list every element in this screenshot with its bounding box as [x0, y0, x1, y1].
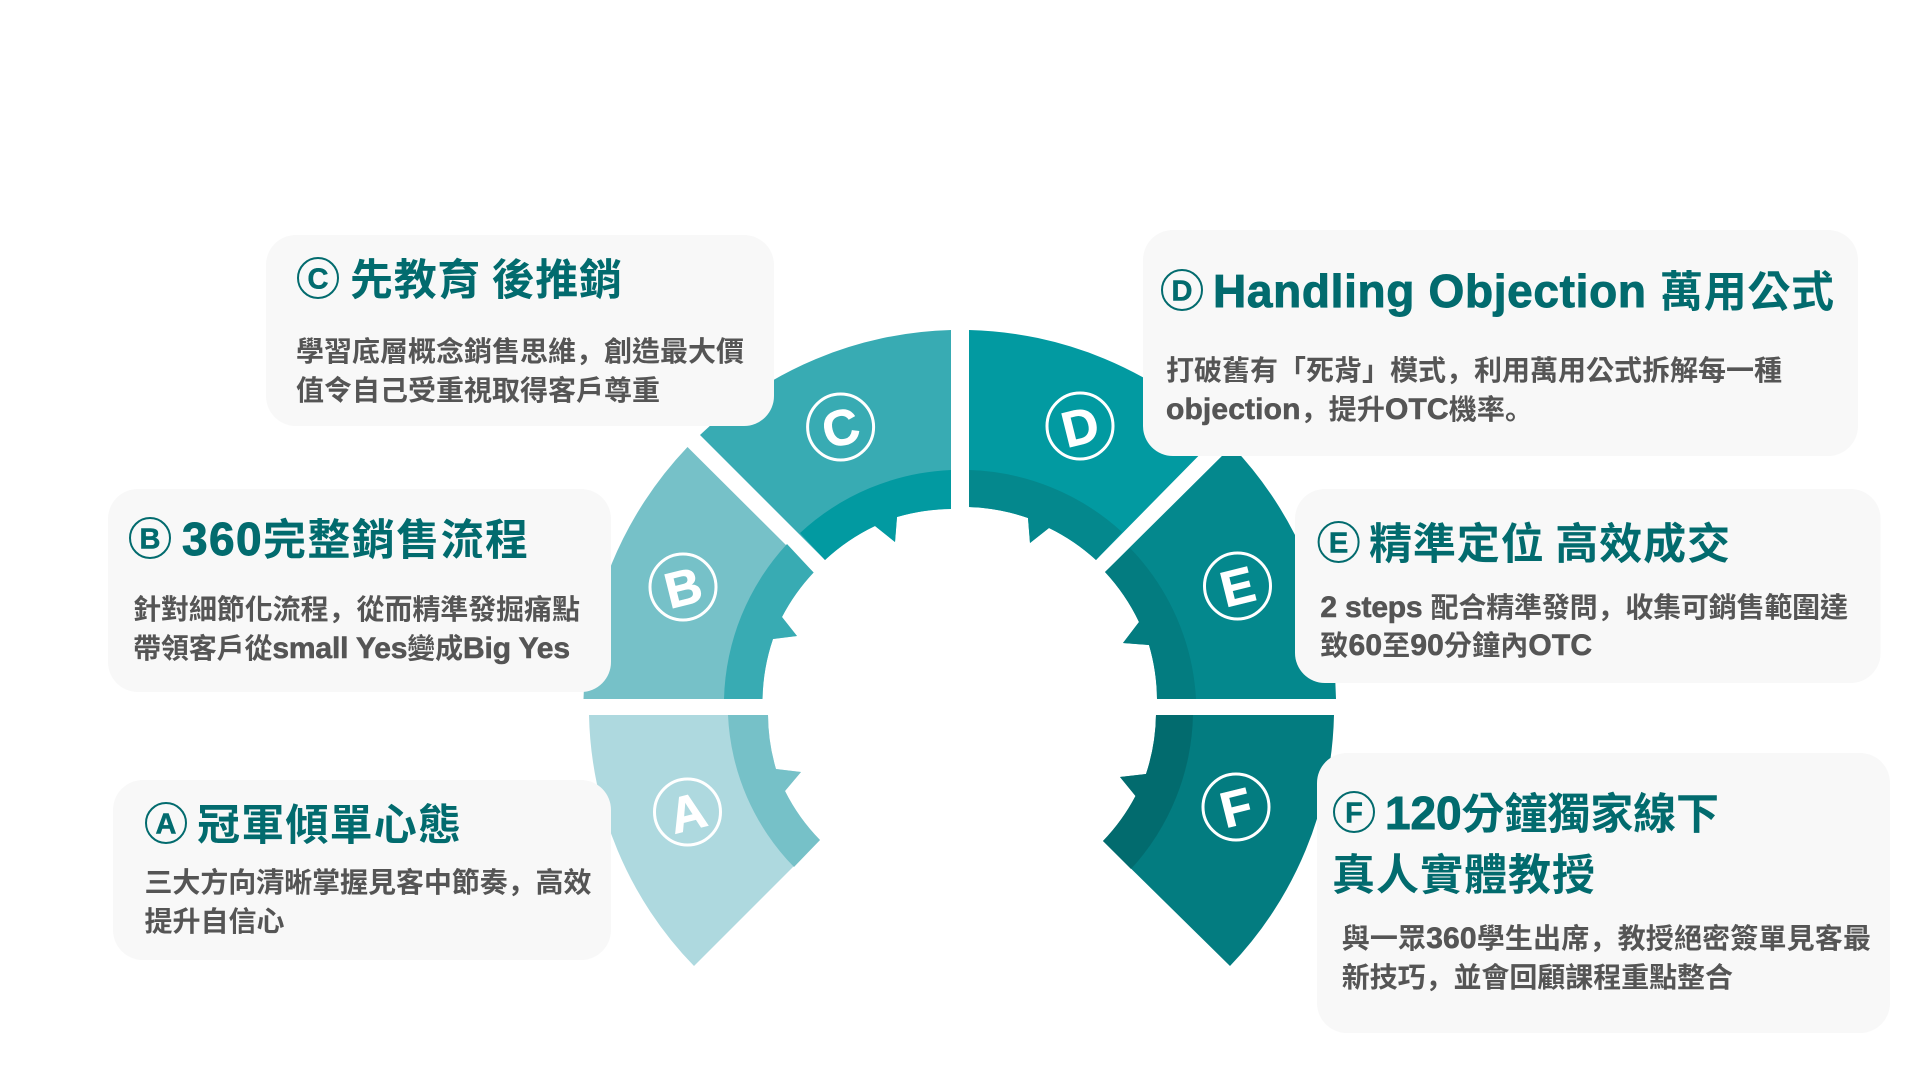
- heading D: Handling Objection 萬用公式: [1213, 258, 1834, 320]
- body text C: 學習底層概念銷售思維，創造最大價: [296, 330, 744, 370]
- badge D: D: [1172, 276, 1192, 308]
- segment E: [1105, 446, 1336, 699]
- body text D: 打破舊有「死背」模式，利用萬用公式拆解每一種: [1166, 349, 1782, 389]
- body text C: [296, 330, 744, 409]
- segment B: B: [659, 556, 708, 620]
- body text B: 帶領客戶從small Yes變成Big Yes: [133, 627, 570, 667]
- panel: D Handling Objection 萬用公式: [1143, 230, 1858, 456]
- segment A: [589, 715, 820, 966]
- segment E: E: [1215, 556, 1261, 618]
- body text A: 三大方向清晰掌握見客中節奏，高效: [144, 861, 592, 901]
- body text F: 與一眾360學生出席，教授絕密簽單見客最: [1342, 917, 1871, 957]
- body text E: [1320, 586, 1848, 664]
- body text F: 新技巧，並會回顧課程重點整合: [1342, 956, 1733, 996]
- heading E: 精準定位 高效成交: [1369, 510, 1730, 572]
- badge C: C: [308, 264, 329, 296]
- badge D: [1162, 270, 1202, 310]
- body text C: 值令自己受重視取得客戶尊重: [296, 369, 660, 409]
- heading C: 先教育 後推銷: [350, 246, 622, 308]
- badge B: [130, 518, 170, 558]
- segment A: A: [663, 781, 712, 845]
- body text E: 2 steps 配合精準發問，收集可銷售範圍達: [1320, 586, 1848, 626]
- heading B: 360完整銷售流程: [182, 506, 528, 568]
- heading F: [1332, 780, 1719, 903]
- badge F: F: [1345, 798, 1363, 830]
- badge E: [1319, 522, 1359, 562]
- badge C: [298, 258, 338, 298]
- panel: B 360完整銷售流程: [108, 489, 611, 692]
- badge E: E: [1329, 528, 1348, 560]
- body text B: [133, 588, 580, 667]
- badge A: [146, 803, 186, 843]
- body text B: 針對細節化流程，從而精準發掘痛點: [133, 588, 580, 628]
- panel: A 冠軍傾單心態: [113, 780, 611, 960]
- badge F: [1334, 792, 1374, 832]
- segment F: [1103, 715, 1334, 966]
- panel: F 120分鐘獨家線下 真人實體教授: [1317, 753, 1890, 1033]
- segment D: [969, 330, 1220, 560]
- badge B: B: [140, 524, 160, 556]
- segment B: [584, 447, 814, 699]
- segment C: [700, 330, 951, 560]
- body text D: [1166, 349, 1782, 428]
- body text D: objection，提升OTC機率。: [1166, 388, 1533, 428]
- segment C: C: [817, 396, 865, 460]
- segment F: F: [1215, 777, 1258, 839]
- heading A: 冠軍傾單心態: [197, 791, 461, 853]
- body text A: 提升自信心: [144, 900, 284, 940]
- body text A: [144, 861, 592, 940]
- panel: C 先教育 後推銷: [266, 235, 774, 426]
- body text F: [1342, 917, 1871, 996]
- panel: E 精準定位 高效成交: [1295, 489, 1881, 683]
- body text E: 致60至90分鐘內OTC: [1320, 624, 1592, 664]
- badge A: A: [156, 808, 177, 840]
- heading F: 120分鐘獨家線下: [1385, 780, 1719, 842]
- semicircular segmented ring diagram: [584, 330, 1336, 966]
- heading F: 真人實體教授: [1332, 841, 1595, 903]
- segment D: D: [1056, 395, 1105, 459]
